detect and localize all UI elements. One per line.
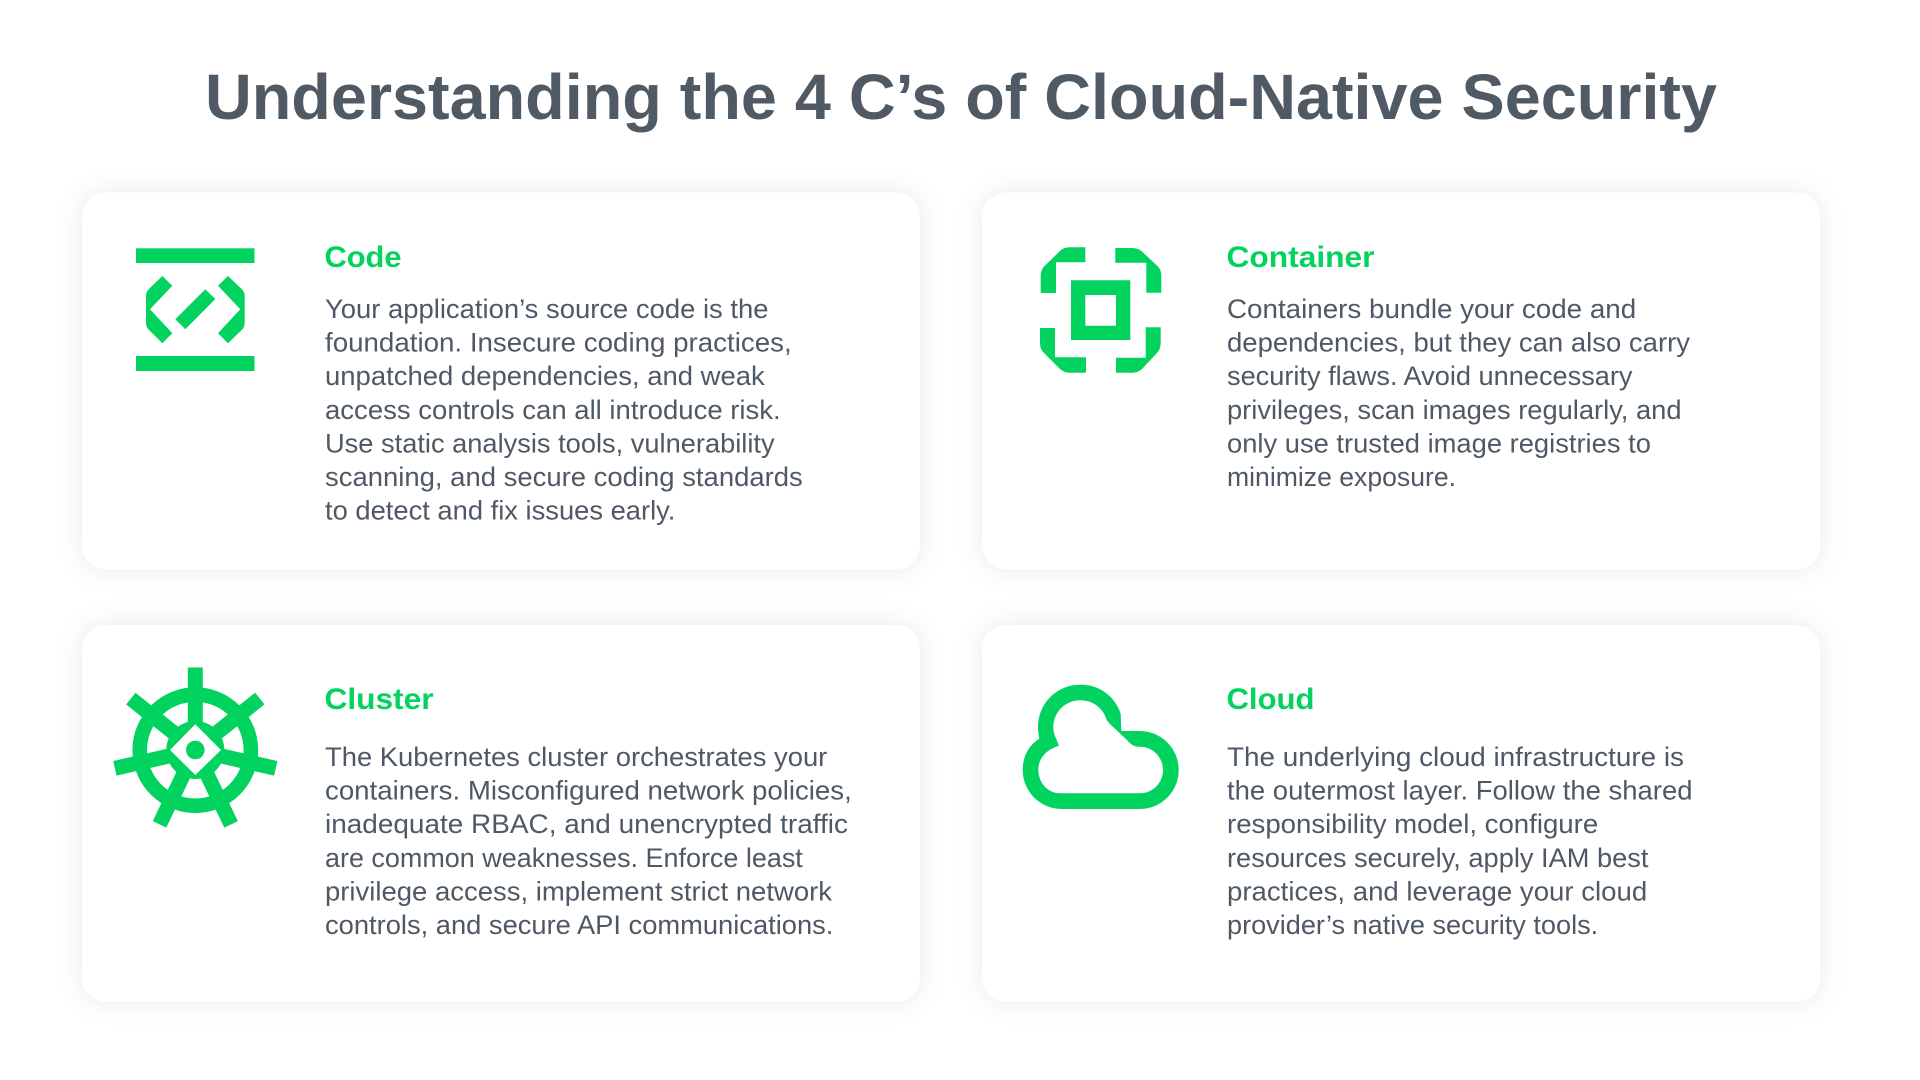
text: code description: foundation. Insecure coding practices, <box>325 328 792 358</box>
heading: cluster: Cluster <box>324 683 434 716</box>
text: cluster description <box>325 742 852 940</box>
heading: cloud: Cloud <box>1226 683 1314 716</box>
heading: code: Code <box>324 241 402 274</box>
text: container description <box>1227 294 1691 492</box>
text: cloud description: provider’s native security tools. <box>1227 910 1598 940</box>
text: code description: unpatched dependencies, and weak <box>325 361 766 391</box>
text: cluster description: The Kubernetes cluster orchestrates your <box>325 742 827 772</box>
title: Understanding the 4 C’s of Cloud-Native Security <box>205 61 1717 133</box>
text: code description: to detect and fix issues early. <box>325 496 675 526</box>
text: code description <box>325 294 803 526</box>
text: cloud description: responsibility model, configure <box>1227 809 1598 839</box>
text: cluster description: privilege access, implement strict network <box>325 876 833 906</box>
panel: container <box>982 192 1820 570</box>
text: cluster description: are common weaknesses. Enforce least <box>325 843 803 873</box>
text: code description: Your application’s source code is the <box>325 294 768 324</box>
icon: container <box>1040 247 1161 373</box>
text: cloud description <box>1227 742 1692 940</box>
text: code description: access controls can all introduce risk. <box>325 395 781 425</box>
panel: code <box>82 192 920 570</box>
text: container description: dependencies, but they can also carry <box>1227 328 1691 358</box>
text: cloud description: The underlying cloud infrastructure is <box>1227 742 1684 772</box>
panel: cloud <box>982 625 1820 1002</box>
icon: cluster helm wheel <box>115 668 276 824</box>
text: cloud description: resources securely, apply IAM best <box>1227 843 1649 873</box>
text: container description: only use trusted image registries to <box>1227 428 1651 458</box>
text: cluster description: containers. Misconfigured network policies, <box>325 776 852 806</box>
text: cloud description: practices, and leverage your cloud <box>1227 876 1647 906</box>
icon: cloud <box>1023 685 1179 809</box>
panel: cluster <box>82 625 920 1002</box>
text: container description: minimize exposure. <box>1227 462 1456 492</box>
icon: code brackets <box>136 248 254 371</box>
text: container description: security flaws. Avoid unnecessary <box>1227 361 1633 391</box>
text: cluster description: inadequate RBAC, and unencrypted traffic <box>325 809 848 839</box>
text: cloud description: the outermost layer. Follow the shared <box>1227 776 1692 806</box>
heading: container: Container <box>1226 241 1375 274</box>
text: cluster description: controls, and secure API communications. <box>325 910 833 940</box>
text: container description: privileges, scan images regularly, and <box>1227 395 1682 425</box>
text: code description: scanning, and secure coding standards <box>325 462 803 492</box>
text: code description: Use static analysis tools, vulnerability <box>325 428 775 458</box>
text: container description: Containers bundle your code and <box>1227 294 1636 324</box>
